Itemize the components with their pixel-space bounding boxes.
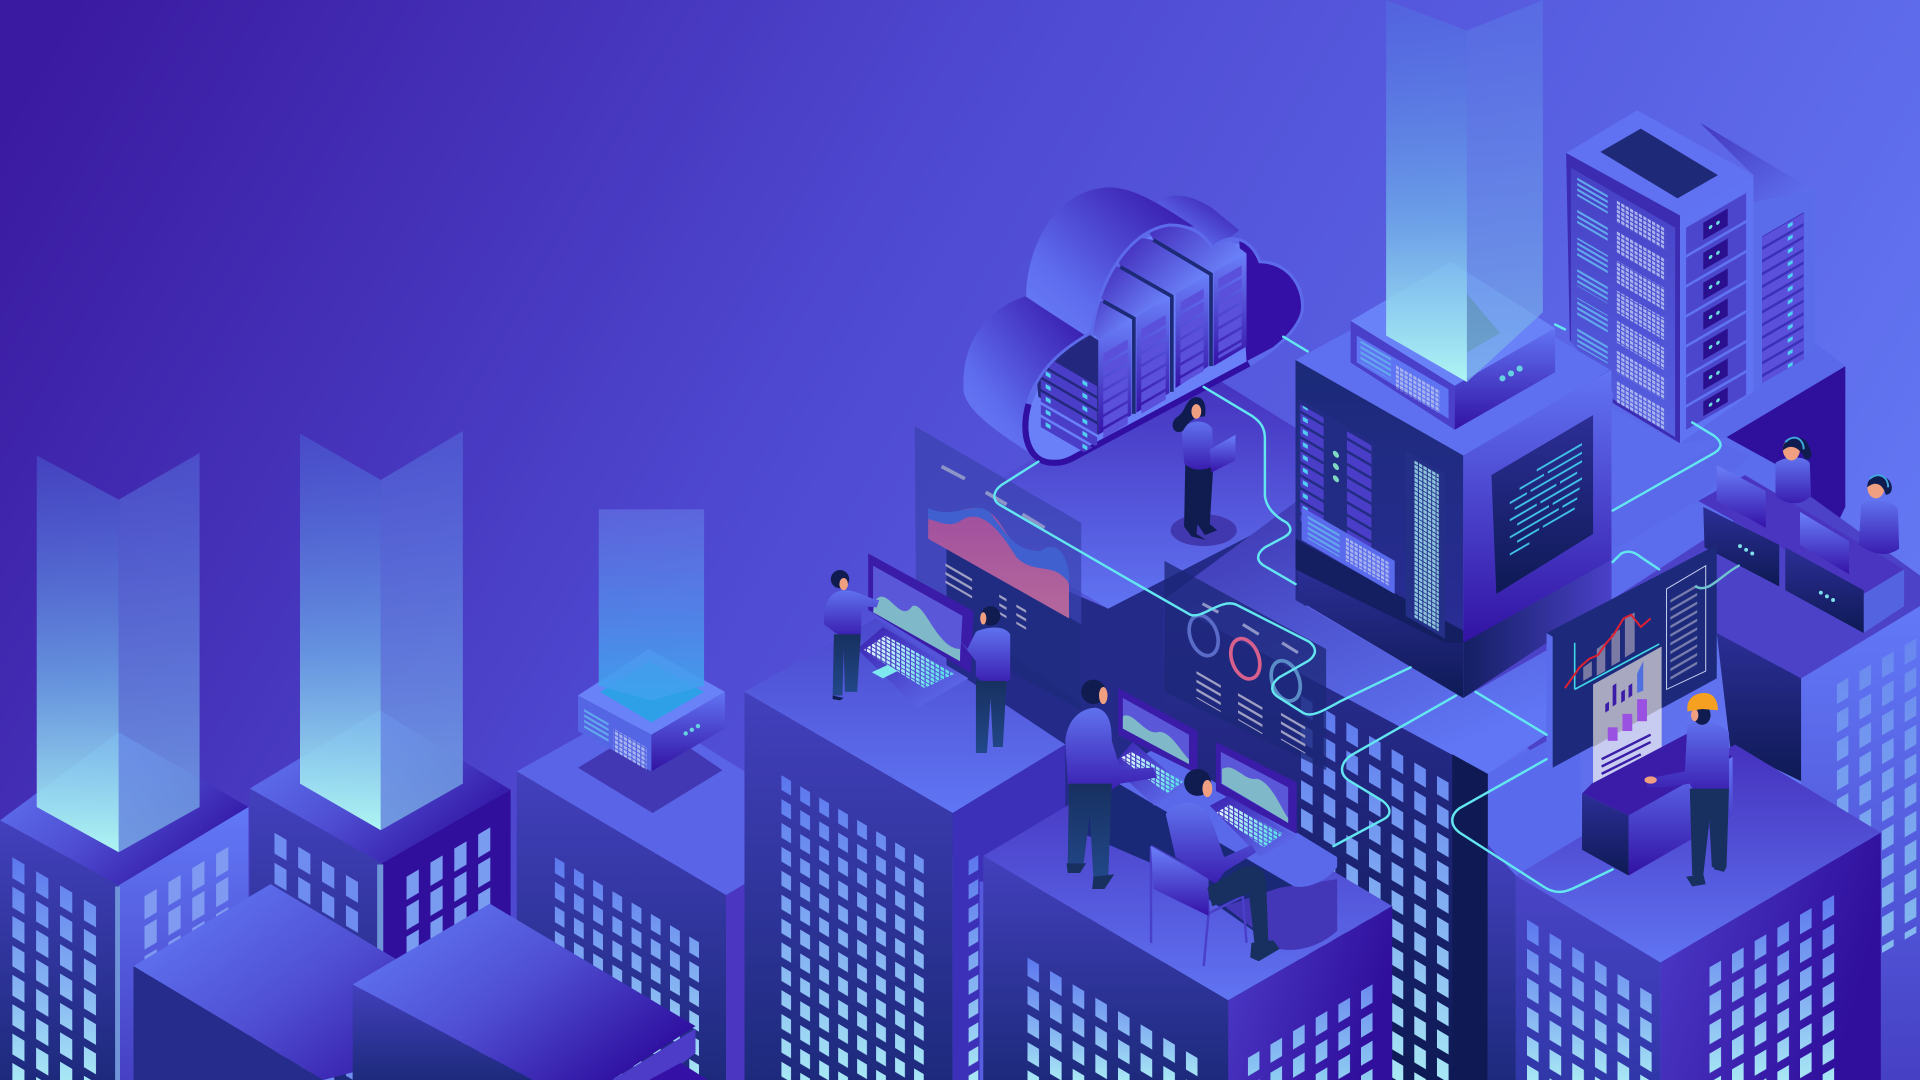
- cube faces: [1296, 276, 1610, 456]
- cloud front face: [1025, 227, 1301, 463]
- platform under cloud: [947, 378, 1329, 857]
- back tower server slots: [1762, 212, 1804, 383]
- code screen: [1491, 415, 1593, 594]
- call centre desks with headset operators: [1698, 437, 1904, 633]
- operator two: [1859, 475, 1899, 554]
- small hologram: [599, 509, 704, 700]
- hard hat: [1687, 693, 1718, 711]
- tower right face server units: [1686, 193, 1746, 430]
- second building: [250, 710, 511, 1080]
- operator one: [1776, 437, 1811, 503]
- seated operator with chair: [1151, 769, 1280, 966]
- panel text frame: [1667, 566, 1706, 689]
- far right building: [1801, 606, 1920, 1080]
- server tower: [1566, 110, 1753, 443]
- connector lines: [994, 324, 1739, 892]
- desk with laptops: [1084, 688, 1337, 950]
- laptop two: [1800, 512, 1849, 574]
- laptop keyboard: [863, 636, 955, 688]
- laptop with chart and two analysts: [824, 553, 1010, 753]
- engineer with hard hat: [1644, 693, 1729, 887]
- central server cube: [1296, 276, 1611, 698]
- laptop right: [1216, 742, 1297, 834]
- woman with laptop: [1171, 397, 1237, 546]
- analyst left: [824, 570, 879, 700]
- back-right server tower: [1700, 122, 1815, 392]
- laptop centre: [1118, 688, 1198, 774]
- dashboard panel with charts: [1547, 545, 1717, 795]
- left rack panel: [1298, 398, 1374, 574]
- red trend chart: [1565, 612, 1659, 689]
- laptop base: [857, 627, 969, 708]
- front centre building: [983, 759, 1392, 1080]
- front roof block right: [353, 904, 708, 1080]
- data building with roof: [1164, 502, 1546, 1080]
- cloud: [963, 187, 1304, 463]
- light pillar second: [300, 431, 463, 830]
- left low panel: [1302, 507, 1395, 594]
- platform behind server tower: [1611, 294, 1845, 576]
- tower left face stripes and grids: [1577, 178, 1665, 431]
- device on cube: [1351, 262, 1555, 430]
- laptop one: [1717, 465, 1766, 528]
- right front building: [1516, 744, 1881, 1080]
- front roof block left: [133, 884, 514, 1080]
- third building: [517, 704, 744, 1080]
- standing engineer: [1065, 680, 1157, 889]
- main light pillar: [1386, 0, 1543, 382]
- vent strip: [1406, 451, 1445, 639]
- left building: [0, 732, 249, 1080]
- cloud server racks: [1037, 226, 1301, 452]
- worker desk: [1582, 732, 1733, 876]
- analyst right: [959, 606, 1010, 753]
- chair: [1151, 846, 1247, 966]
- cube base: [1298, 569, 1463, 698]
- translucent area chart panel: [915, 426, 1081, 710]
- desk fronts: [1703, 507, 1779, 587]
- seated body: [1166, 803, 1256, 884]
- translucent donut chart panel: [1164, 561, 1326, 770]
- device shadow: [578, 722, 722, 813]
- cloud back lobes: [1157, 195, 1239, 251]
- light pillar left: [37, 453, 200, 852]
- centre-left building: [744, 618, 1065, 1080]
- area chart waves: [928, 508, 1069, 618]
- report sheet: [1593, 647, 1662, 795]
- laptop screen: [868, 553, 973, 673]
- surface around server cube: [1463, 408, 1920, 781]
- small device with hologram: [578, 509, 725, 771]
